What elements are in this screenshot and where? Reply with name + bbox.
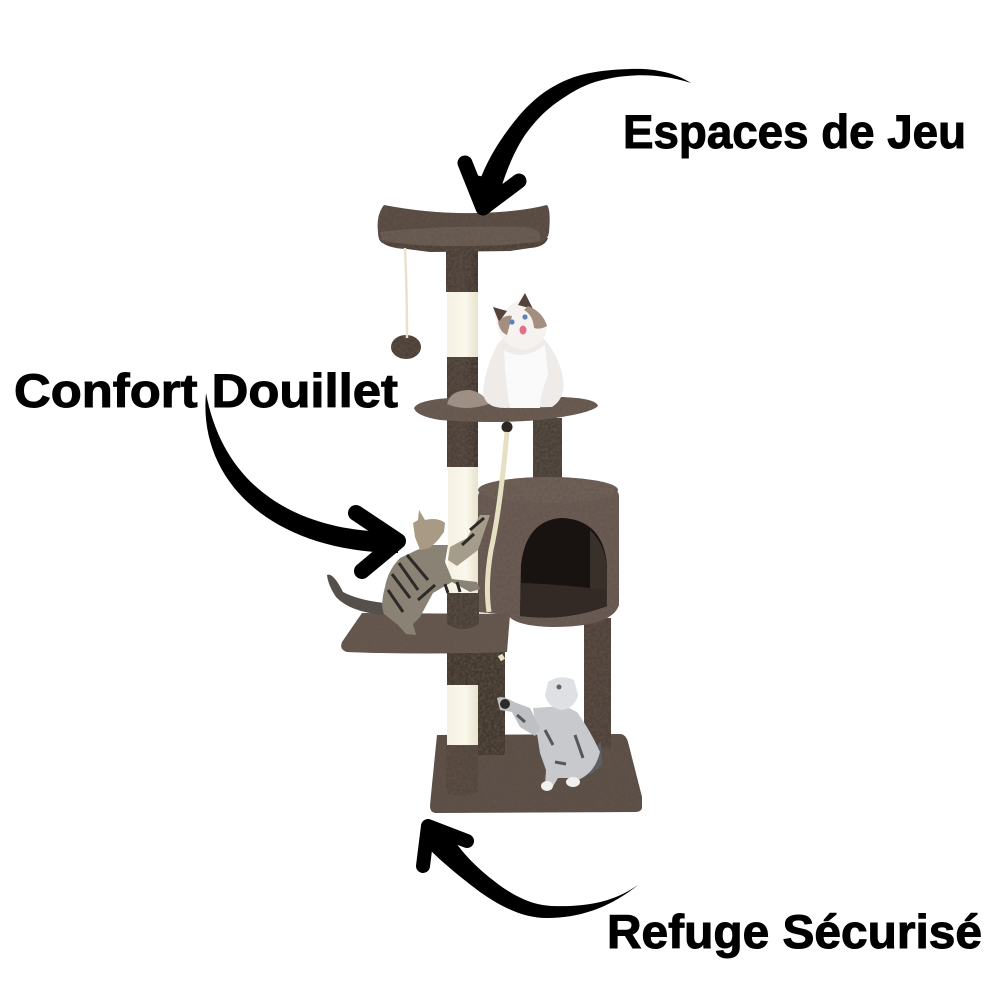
paw pad [500, 699, 510, 709]
condo top [478, 477, 618, 503]
ears [493, 293, 533, 322]
arrow: to tabby cat [205, 393, 404, 571]
condo floor [520, 583, 606, 618]
cat: ragdoll on middle platform [447, 293, 564, 408]
stripes [517, 715, 583, 764]
body [382, 545, 480, 635]
top perch cushion [380, 227, 540, 246]
condo inner wall [590, 530, 607, 606]
tail [585, 741, 602, 775]
base platform [430, 734, 642, 813]
head [413, 510, 445, 550]
chest highlight [504, 345, 548, 408]
stripes [388, 518, 484, 612]
eye [556, 684, 562, 690]
rope end [500, 655, 503, 660]
top perch [378, 205, 550, 243]
hanging rope [487, 432, 507, 612]
tail [447, 390, 489, 408]
arrow: to top perch [465, 69, 691, 212]
eyes [509, 319, 515, 325]
heading: Espaces de Jeu: Espaces de Jeu [623, 105, 966, 158]
arrow: to base [423, 822, 638, 918]
arm [497, 697, 540, 736]
main post dark 3 [447, 420, 478, 467]
right post [584, 618, 611, 748]
upper support post [533, 418, 562, 490]
condo [478, 477, 619, 627]
sisal lower [447, 685, 478, 745]
small ball [502, 422, 512, 432]
body [483, 335, 564, 408]
cat: tabby climbing [327, 510, 490, 635]
condo opening [520, 518, 607, 618]
body [533, 706, 600, 788]
rear post [476, 650, 505, 755]
pom pom string [405, 248, 407, 338]
main post foot [446, 744, 478, 795]
cat tree [341, 205, 642, 813]
front arm [448, 515, 490, 566]
cat: grey scottish fold [497, 677, 602, 791]
lower main post on platform [447, 592, 479, 629]
heading: Confort Douillet: Confort Douillet [14, 364, 398, 417]
heading: Refuge Sécurisé: Refuge Sécurisé [607, 905, 982, 958]
main post dark 2 [447, 356, 478, 406]
face mask [498, 306, 547, 335]
sisal upper [447, 292, 478, 357]
main post lower dark [447, 653, 478, 686]
tail [327, 575, 384, 615]
pom pom [391, 335, 421, 359]
middle platform [414, 397, 598, 422]
tongue [520, 326, 526, 334]
main post upper dark [446, 244, 478, 292]
feet [541, 781, 553, 791]
head [545, 677, 578, 710]
sisal middle [448, 467, 478, 593]
head [493, 293, 547, 350]
lower platform [341, 613, 510, 654]
top perch underside [380, 235, 548, 252]
